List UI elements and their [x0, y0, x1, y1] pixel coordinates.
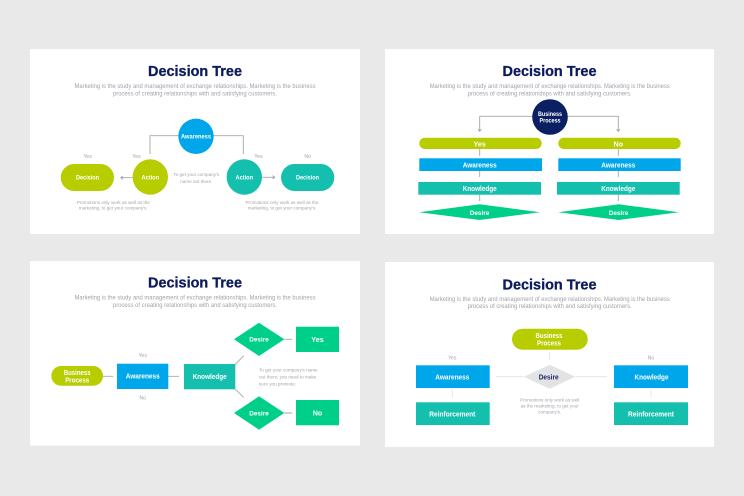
note: as the marketing, to get your: [521, 404, 579, 408]
node: desire: [524, 365, 575, 389]
node: business process: Business: [64, 368, 91, 377]
branch labels: Yes: [132, 154, 141, 160]
description: [430, 83, 670, 97]
node: reinforcement right: [614, 402, 688, 425]
node: business process: Business: [536, 331, 562, 340]
note: company's.: [538, 409, 561, 414]
column: no: Desire: [609, 210, 629, 217]
description: Marketing is the study and management of exchange relationships. Marketing is the business: [74, 294, 316, 302]
node: awareness: Awareness: [181, 134, 212, 141]
note: center: name out there.: [180, 179, 212, 184]
column: yes: Knowledge: [463, 184, 497, 193]
description: [74, 294, 316, 309]
note: out there, you need to make: [259, 375, 317, 380]
node: awareness: Awareness: [435, 372, 469, 381]
panel: horizontal tree: [30, 261, 360, 446]
node: desire bottom: Desire: [249, 410, 269, 417]
node: decision teal: Decision: [296, 174, 319, 181]
branch labels: Yes: [83, 154, 92, 160]
title: Decision Tree: [148, 276, 242, 292]
branch labels: No: [648, 356, 654, 362]
panel: circle decision tree: [30, 49, 360, 234]
node: business process: [512, 329, 588, 350]
branch labels: Yes: [254, 154, 263, 160]
note: right: [245, 200, 319, 211]
node: yes: Yes: [311, 335, 324, 344]
node: business process: Process: [65, 376, 89, 385]
note: center: To get your company's: [173, 172, 220, 177]
node: decision green: Decision: [76, 174, 99, 181]
branch labels: No: [139, 396, 146, 402]
note: left: Promotions only work as well as the: [77, 200, 150, 205]
node: no: No: [313, 408, 323, 417]
note: To get your company's name: [259, 368, 318, 373]
branch labels: [448, 356, 654, 362]
node: knowledge: [614, 365, 688, 388]
node: business process: [532, 99, 568, 135]
description: [74, 83, 316, 97]
panel: central desire tree: [385, 262, 714, 447]
column: yes: Yes: [473, 139, 486, 148]
column connectors: [480, 149, 618, 201]
node: awareness: Awareness: [126, 372, 160, 380]
node: reinforcement left: Reinforcement: [429, 409, 476, 418]
note: left: marketing, to get your company's.: [79, 206, 148, 211]
node: reinforcement left: [416, 402, 490, 425]
node: desire top: [234, 323, 284, 356]
title: Decision Tree: [502, 277, 596, 293]
arrow: action to decision left: [121, 176, 133, 179]
node: awareness: [117, 364, 168, 389]
branch labels: No: [304, 154, 311, 160]
description: Marketing is the study and management of exchange relationships. Marketing is the business: [430, 296, 670, 303]
description: process of creating relationships with and satisfying customers.: [113, 90, 277, 97]
node: yes: [296, 327, 339, 352]
connector: process to columns: [478, 116, 620, 132]
column: yes: Desire: [470, 210, 490, 217]
node: desire bottom: [234, 396, 284, 430]
note: sure you promote.: [259, 382, 296, 387]
column: no: No: [614, 139, 624, 148]
node: action teal: Action: [236, 174, 253, 181]
connector: awareness to actions: [150, 136, 243, 154]
node: business process: Business: [538, 111, 562, 118]
note: left: [77, 200, 150, 211]
note: [259, 368, 318, 387]
description: Marketing is the study and management of exchange relationships. Marketing is the business: [74, 83, 316, 90]
node: business process: Process: [537, 339, 561, 348]
column: no: Knowledge: [601, 184, 635, 193]
node: awareness: [178, 119, 214, 154]
node: knowledge: Knowledge: [193, 372, 227, 381]
node: no: [296, 400, 339, 425]
column: no: Awareness: [601, 160, 635, 169]
note: center: [173, 172, 220, 184]
description: process of creating relationships with and satisfying customers.: [468, 90, 632, 97]
node: awareness: [416, 365, 490, 388]
connectors: [452, 352, 651, 397]
column: yes: [418, 138, 542, 220]
node: reinforcement right: Reinforcement: [628, 409, 675, 418]
node: action teal: [227, 159, 262, 195]
note: right: Promotions only work as well as the: [245, 200, 319, 205]
title: Decision Tree: [502, 64, 596, 80]
node: action green: [133, 159, 168, 195]
column: yes: Awareness: [463, 160, 497, 169]
node: business process: [51, 366, 103, 386]
branch labels: [138, 353, 147, 402]
node: knowledge: [184, 364, 235, 389]
title: Decision Tree: [148, 64, 242, 80]
branch labels: Yes: [138, 353, 147, 359]
note: right: marketing, to get your company's.: [248, 206, 316, 211]
description: process of creating relationships with and satisfying customers.: [113, 302, 277, 309]
node: business process: Process: [540, 118, 561, 125]
description: process of creating relationships with and satisfying customers.: [468, 303, 632, 310]
note: Promotions only work as well: [520, 398, 579, 402]
description: Marketing is the study and management of exchange relationships. Marketing is the business: [430, 83, 670, 90]
note: [520, 398, 579, 414]
connectors: [103, 339, 292, 413]
panel: two column flow: [385, 49, 714, 234]
node: knowledge: Knowledge: [634, 372, 668, 381]
node: decision teal: [281, 164, 334, 191]
node: decision green: [61, 164, 114, 191]
node: action green: Action: [142, 174, 159, 181]
column: no: [557, 138, 681, 220]
arrow: action to decision right: [262, 176, 275, 179]
branch labels: Yes: [448, 356, 457, 362]
node: desire top: Desire: [249, 337, 269, 344]
node: desire: Desire: [539, 372, 559, 381]
branch labels: [83, 154, 311, 160]
description: [430, 296, 670, 310]
